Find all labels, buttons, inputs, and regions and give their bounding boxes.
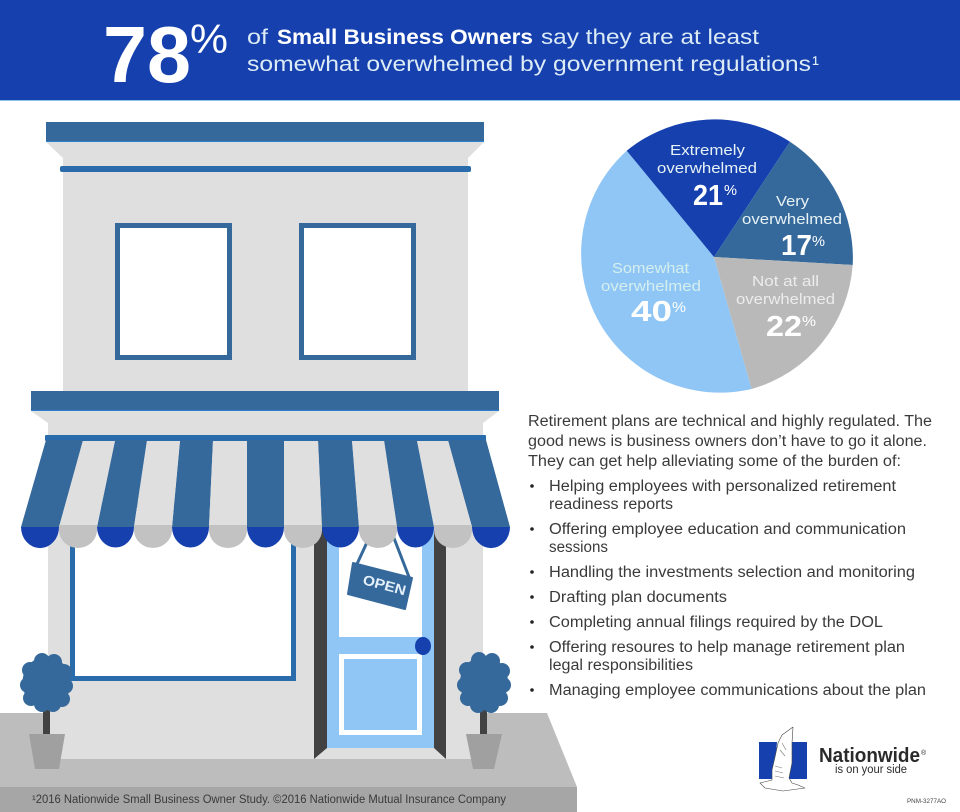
roof cornice	[46, 122, 484, 142]
bullet list: legal responsibilities	[549, 657, 693, 674]
slice: very overwhelmed 17%: 17	[781, 230, 812, 262]
cornice stripe	[60, 166, 471, 172]
slice: somewhat overwhelmed 40%	[581, 151, 752, 393]
logo mark: N with eagle	[759, 727, 807, 791]
slice: very overwhelmed 17%	[714, 142, 853, 265]
door knob	[415, 637, 431, 655]
bullet list: Managing employee communications about the plan	[549, 682, 926, 699]
slice: not at all overwhelmed 22%: overwhelmed	[736, 292, 835, 308]
logo wordmark: Nationwide	[819, 745, 920, 767]
bullet list: Handling the investments selection and monitoring	[549, 564, 915, 581]
slice: extremely overwhelmed 21%: overwhelmed	[657, 161, 757, 177]
slice: very overwhelmed 17%: overwhelmed	[742, 212, 842, 228]
slice: not at all overwhelmed 22%: Not at all	[752, 274, 819, 290]
intro paragraph: good news is business owners don’t have to go it alone.	[528, 433, 927, 450]
right potted plant	[457, 652, 511, 769]
bullet list: Completing annual filings required by the DOL	[549, 614, 883, 631]
intro paragraph	[528, 413, 932, 470]
slice: somewhat overwhelmed 40%: overwhelmed	[601, 279, 701, 295]
bullet list: Helping employees with personalized retirement	[549, 478, 897, 495]
middle band	[31, 391, 499, 411]
intro paragraph: Retirement plans are technical and highly regulated. The	[528, 413, 932, 430]
slice: extremely overwhelmed 21%: Extremely	[670, 143, 746, 159]
upper storey wall	[46, 142, 484, 391]
slice: not at all overwhelmed 22%: 22	[766, 311, 802, 343]
pie chart	[581, 119, 853, 393]
slice: somewhat overwhelmed 40%: Somewhat	[612, 261, 689, 277]
bullet list: sessions	[549, 539, 608, 556]
storefront building	[21, 122, 510, 759]
bullet list: Drafting plan documents	[549, 589, 727, 606]
open sign	[348, 533, 412, 609]
slice: extremely overwhelmed 21%: %	[724, 182, 737, 199]
sidewalk ground	[0, 713, 577, 812]
shop window	[72, 505, 294, 678]
headline text: ¹	[812, 53, 819, 76]
slice: not at all overwhelmed 22%: %	[802, 313, 816, 330]
slice: very overwhelmed 17%: %	[812, 233, 825, 250]
lower storey wall	[31, 411, 499, 759]
bullet list: Offering employee education and communication	[549, 521, 906, 538]
logo wordmark: is on your side	[835, 764, 907, 776]
headline statistic: 78%: %	[190, 16, 228, 62]
headline text: say they are at least	[541, 26, 759, 49]
footnote: ¹2016 Nationwide Small Business Owner Study. ©2016 Nationwide Mutual Insurance Company	[32, 794, 506, 806]
slice: not at all overwhelmed 22%	[714, 257, 853, 389]
headline text: of	[247, 26, 268, 49]
bullet list: Offering resoures to help manage retirement plan	[549, 639, 905, 656]
slice: somewhat overwhelmed 40%: 40	[631, 296, 672, 328]
door frame	[314, 510, 446, 759]
upper right window	[302, 226, 414, 358]
headline text	[247, 26, 819, 76]
door	[327, 510, 434, 748]
slice: very overwhelmed 17%: Very	[776, 194, 810, 210]
slice: extremely overwhelmed 21%: 21	[693, 180, 723, 212]
open sign: OPEN	[361, 571, 408, 598]
headline text: somewhat overwhelmed by government regulations	[247, 53, 811, 76]
striped awning	[21, 435, 510, 548]
slice: extremely overwhelmed 21%	[627, 119, 790, 257]
intro paragraph: They can get help alleviating some of the burden of:	[528, 453, 901, 470]
header banner	[0, 0, 960, 101]
headline statistic: 78%: 78	[103, 10, 191, 99]
left potted plant	[20, 653, 73, 769]
bullet list: readiness reports	[549, 496, 673, 513]
logo wordmark: ®	[921, 749, 927, 757]
upper left window	[118, 226, 230, 358]
bullet list	[530, 478, 926, 699]
headline text: Small Business Owners	[277, 26, 533, 49]
document code: PNM-3277AO	[907, 799, 946, 805]
slice: somewhat overwhelmed 40%: %	[672, 299, 686, 316]
Nationwide logo	[759, 727, 927, 791]
